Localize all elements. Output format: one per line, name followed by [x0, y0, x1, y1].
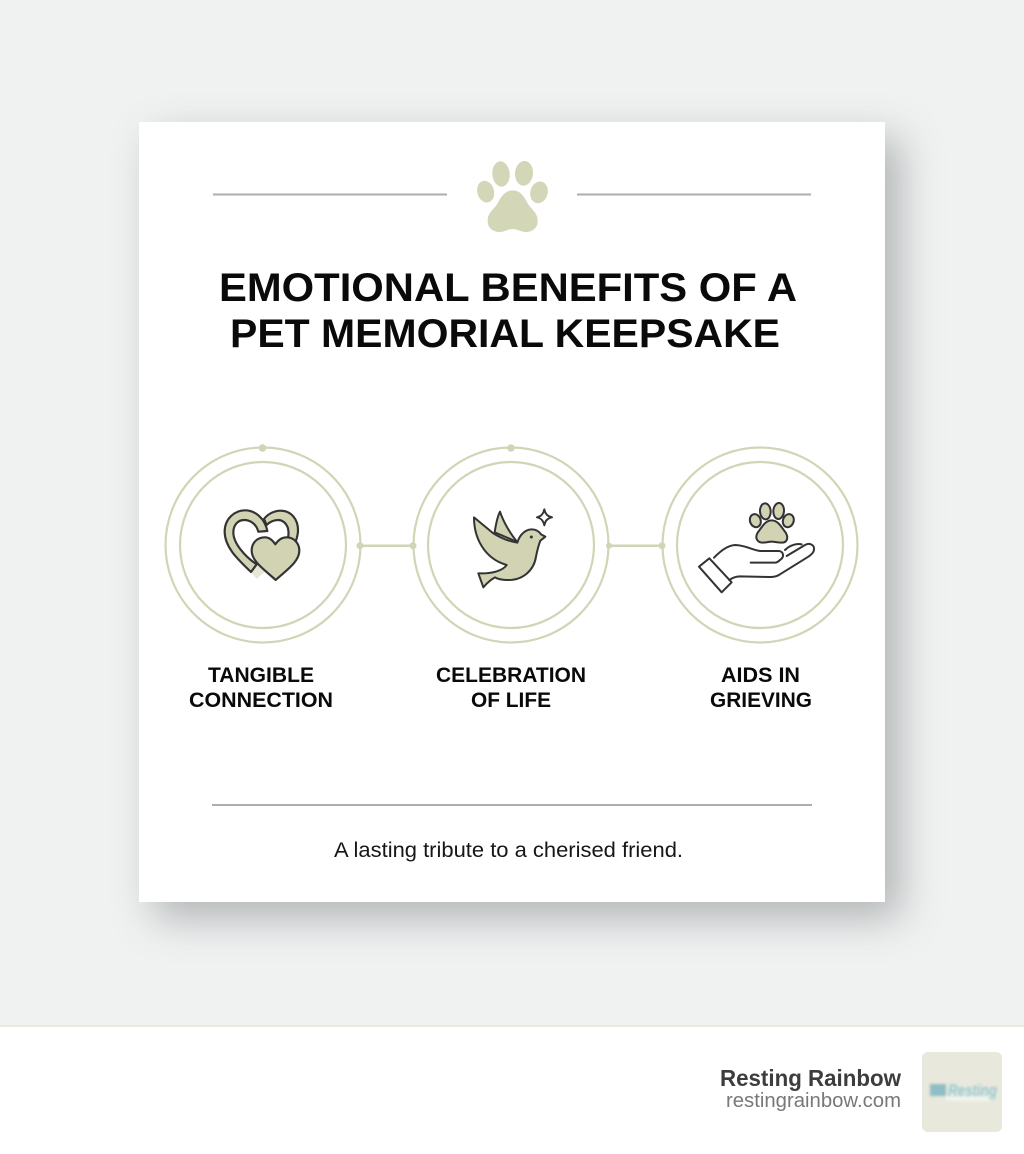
panel: tangible connection circle	[166, 444, 360, 642]
label: celebration of life: CELEBRATION	[436, 664, 586, 687]
label: aids in grieving	[710, 664, 812, 712]
logo tile: Resting	[948, 1081, 997, 1100]
panel: memorial card	[139, 122, 885, 902]
connector: second to third circle	[606, 542, 666, 549]
panel: aids in grieving circle	[662, 448, 858, 642]
connector: first to second circle	[356, 542, 416, 549]
label: aids in grieving: AIDS IN	[721, 664, 800, 687]
tagline: A lasting tribute to a cherised friend.	[334, 839, 683, 862]
title	[219, 266, 797, 356]
icon: interlocked hearts	[225, 510, 299, 580]
title: EMOTIONAL BENEFITS OF A	[219, 266, 797, 310]
icon: hand holding paw	[699, 503, 814, 592]
footer bar	[0, 1025, 1024, 1154]
label: tangible connection	[189, 664, 333, 712]
icon: dove with star	[474, 509, 552, 587]
panel: celebration of life circle	[414, 444, 608, 642]
label: celebration of life	[436, 664, 586, 712]
brand name: Resting Rainbow	[720, 1065, 901, 1091]
label: aids in grieving: GRIEVING	[710, 689, 812, 712]
label: tangible connection: TANGIBLE	[208, 664, 314, 687]
brand url: restingrainbow.com	[726, 1090, 901, 1112]
label: tangible connection: CONNECTION	[189, 689, 333, 712]
icon: header paw print	[475, 160, 550, 232]
title: PET MEMORIAL KEEPSAKE	[230, 312, 780, 356]
label: celebration of life: OF LIFE	[471, 689, 551, 712]
logo tile	[922, 1052, 1002, 1132]
